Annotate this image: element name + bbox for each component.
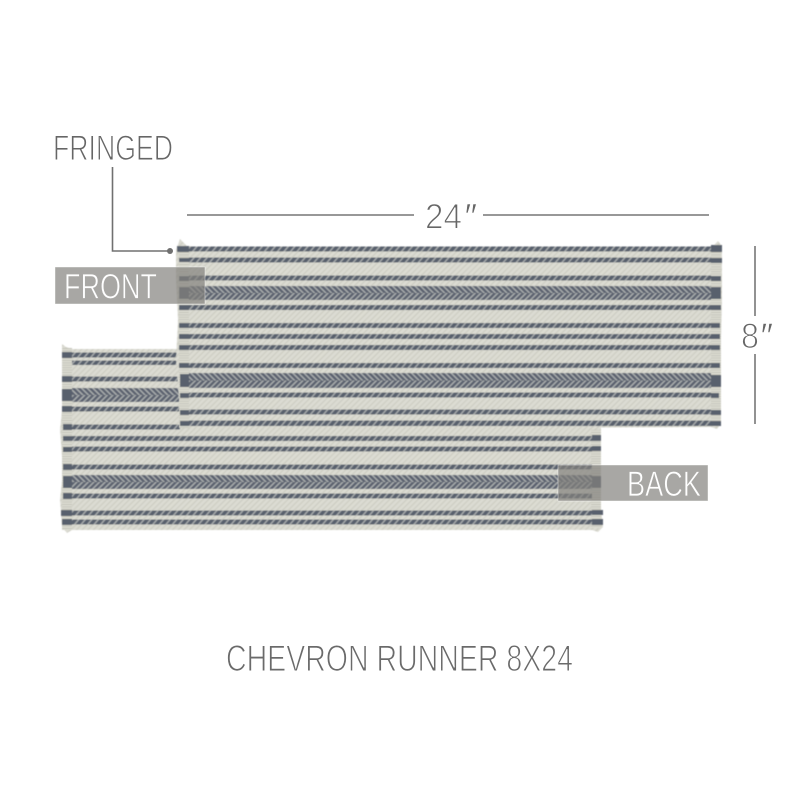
back runner <box>60 344 603 533</box>
front runner fringe right <box>711 248 721 426</box>
back runner stripes <box>72 352 592 524</box>
fringed leader line with dot <box>112 167 173 254</box>
dimension: width 24 inches: 24 <box>425 198 462 236</box>
back runner fringe left <box>62 348 72 530</box>
label: back <box>558 465 708 504</box>
back runner dark fringe ends <box>61 352 603 525</box>
dimension: width 24 inches <box>187 198 709 236</box>
dimension: height 8 inches: ″ <box>759 317 773 356</box>
front runner fringe left <box>179 248 189 428</box>
front runner <box>176 239 722 432</box>
front runner body <box>176 239 722 432</box>
dimension: height 8 inches <box>741 246 773 424</box>
back runner body <box>60 344 603 533</box>
dimension: width 24 inches: ″ <box>463 198 477 236</box>
label: back: BACK <box>627 465 701 504</box>
front runner dark fringe ends <box>177 245 722 426</box>
dimension: height 8 inches: 8 <box>741 317 759 356</box>
label: fringed: FRINGED <box>53 129 173 168</box>
label: front: FRONT <box>64 268 157 306</box>
back runner fringe right <box>591 430 601 528</box>
front runner stripes <box>189 246 711 426</box>
title: product name: CHEVRON RUNNER 8X24 <box>226 638 573 679</box>
